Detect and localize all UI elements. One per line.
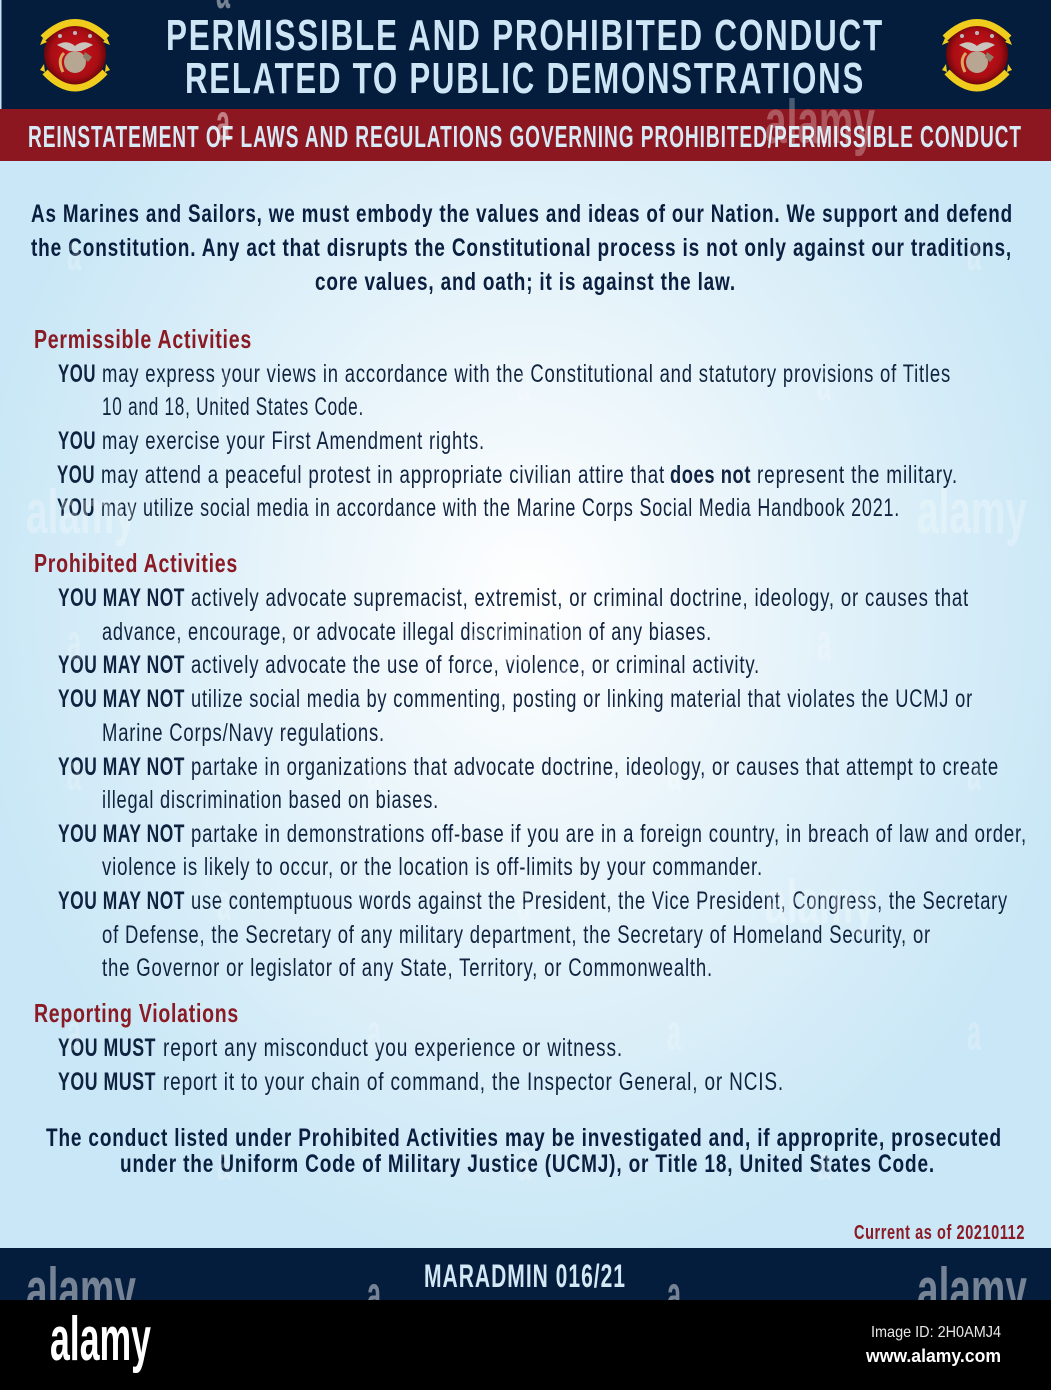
image id: Image ID: 2H0AMJ4 <box>871 1324 1001 1341</box>
watermark overlay: a <box>817 614 832 672</box>
list: permissible items: YOU <box>57 494 95 522</box>
watermark overlay: alamy <box>26 1256 136 1325</box>
list: prohibited items <box>58 584 1027 982</box>
list: permissible items: represent the military. <box>757 461 958 489</box>
watermark overlay: alamy <box>26 478 136 547</box>
list: permissible items: may attend a peaceful protest in appropriate civilian attire that <box>101 461 665 489</box>
closing statement <box>46 1124 1002 1178</box>
watermark overlay: a <box>517 874 532 932</box>
list: prohibited items: actively advocate the use of force, violence, or criminal activity. <box>191 651 760 679</box>
stock photo credit bar <box>0 1300 1051 1390</box>
watermark overlay: a <box>817 354 832 412</box>
watermark overlay: a <box>667 1004 682 1062</box>
list: prohibited items: violence is likely to occur, or the location is off-limits by your commander. <box>102 853 763 881</box>
intro statement <box>31 200 1013 296</box>
watermark overlay: a <box>667 1266 682 1324</box>
intro statement: core values, and oath; it is against the law. <box>315 268 736 296</box>
list: permissible items: YOU <box>57 461 95 489</box>
list: reporting items: report any misconduct you experience or witness. <box>163 1034 623 1062</box>
watermark overlay: alamy <box>470 608 580 677</box>
list: permissible items: 10 and 18, United States Code. <box>102 393 364 421</box>
watermark overlay: a <box>667 744 682 802</box>
watermark overlay: alamy <box>765 868 875 937</box>
watermark overlay: a <box>517 1134 532 1192</box>
list: reporting items: YOU MUST <box>58 1034 156 1062</box>
watermark overlay: a <box>517 354 532 412</box>
watermark overlay: a <box>367 744 382 802</box>
watermark overlay: a <box>216 94 231 152</box>
list: prohibited items: YOU MAY NOT <box>58 651 185 679</box>
footer banner <box>0 1248 1051 1300</box>
watermark overlay: a <box>367 1004 382 1062</box>
heading: reporting violations: Reporting Violations <box>34 998 239 1028</box>
list: permissible items: YOU <box>58 360 96 388</box>
header banner <box>0 0 1051 109</box>
list: prohibited items: YOU MAY NOT <box>58 685 185 713</box>
watermark overlay: a <box>817 1134 832 1192</box>
list: prohibited items: YOU MAY NOT <box>58 820 185 848</box>
watermark overlay: alamy <box>765 88 875 157</box>
watermark overlay: a <box>967 224 982 282</box>
list: prohibited items: the Governor or legislator of any State, Territory, or Commonwealth. <box>102 954 713 982</box>
icon: left Marine Corps seal <box>40 22 110 88</box>
alamy logo: alamy <box>50 1305 151 1374</box>
list: prohibited items: Marine Corps/Navy regulations. <box>102 719 385 747</box>
list: prohibited items: advance, encourage, or advocate illegal discrimination of any biases. <box>102 618 712 646</box>
section: reporting violations <box>34 998 784 1096</box>
watermark overlay: a <box>217 354 232 412</box>
list: reporting items: report it to your chain of command, the Inspector General, or NCIS. <box>163 1068 784 1096</box>
watermark overlay: a <box>217 874 232 932</box>
watermark overlay: a <box>367 1266 382 1324</box>
list: reporting items: YOU MUST <box>58 1068 156 1096</box>
list: permissible items: may exercise your First Amendment rights. <box>102 427 485 455</box>
section: prohibited activities <box>34 548 1027 982</box>
list: prohibited items: YOU MAY NOT <box>58 753 185 781</box>
watermark overlay: a <box>67 744 82 802</box>
list: prohibited items: YOU MAY NOT <box>58 887 185 915</box>
reference number: MARADMIN 016/21 <box>424 1258 626 1294</box>
list: reporting items <box>58 1034 784 1096</box>
heading: prohibited activities: Prohibited Activities <box>34 548 238 578</box>
icon: right Marine Corps seal <box>942 22 1012 88</box>
watermark overlay: a <box>67 614 82 672</box>
subtitle banner <box>0 109 1051 161</box>
list: prohibited items: illegal discrimination based on biases. <box>102 786 439 814</box>
title <box>166 11 884 103</box>
page background <box>0 161 1051 1248</box>
watermark overlay: a <box>967 744 982 802</box>
watermark overlay: a <box>967 1004 982 1062</box>
watermark overlay: a <box>67 1004 82 1062</box>
section: permissible activities <box>34 324 958 522</box>
list: permissible items <box>57 360 958 522</box>
heading: permissible activities: Permissible Activities <box>34 324 252 354</box>
list: prohibited items: YOU MAY NOT <box>58 584 185 612</box>
list: permissible items: does not <box>670 461 751 489</box>
watermark overlay: a <box>217 1134 232 1192</box>
watermark overlay: a <box>67 224 82 282</box>
list: permissible items: YOU <box>58 427 96 455</box>
website: www.alamy.com <box>865 1346 1001 1366</box>
